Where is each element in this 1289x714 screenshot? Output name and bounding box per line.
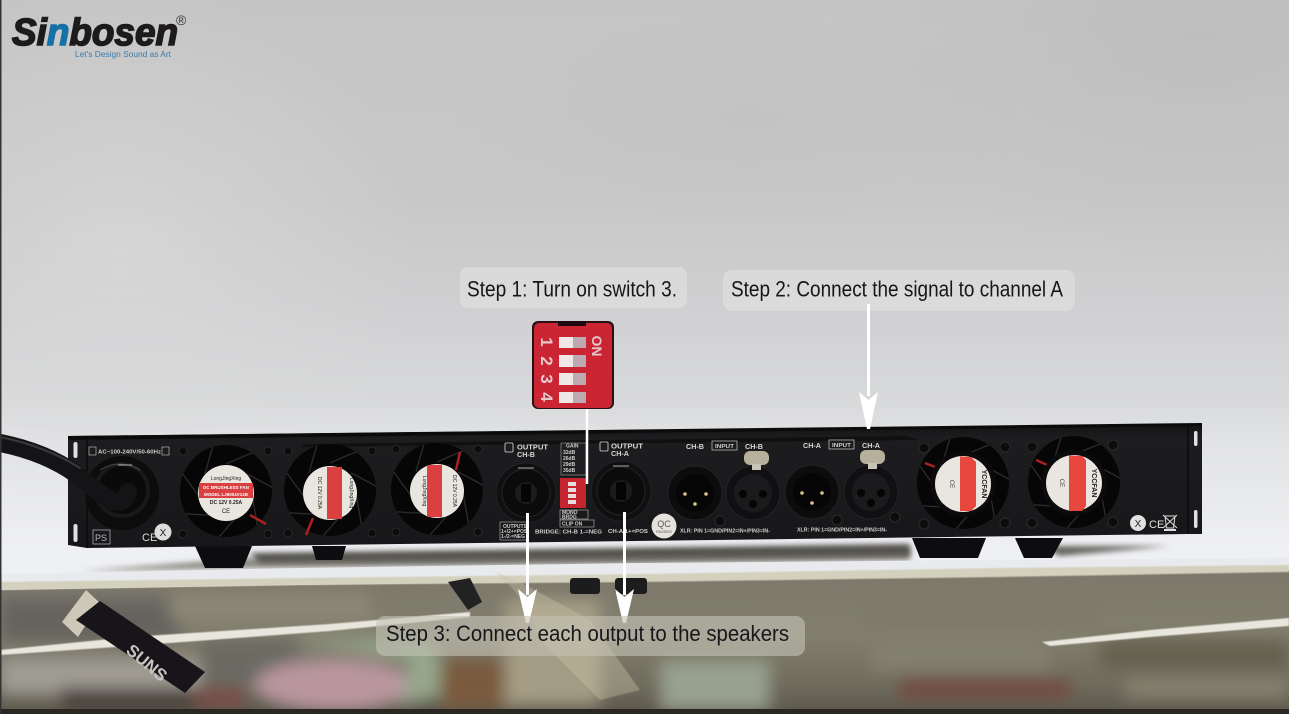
input labels: CH-A — [862, 443, 880, 450]
gain panel: GAIN — [566, 444, 579, 450]
gain panel: 26dB — [563, 456, 576, 462]
gain panel: 35dB — [563, 468, 576, 474]
small DIP switch on panel — [560, 478, 586, 508]
reflective metal surface — [0, 570, 1289, 714]
fan 1: DC BRUSHLESS FAN — [203, 485, 249, 490]
left certification marks: PS — [95, 533, 107, 543]
input labels: INPUT — [715, 444, 734, 450]
output label CH-A: OUTPUT — [611, 444, 644, 450]
power cable gland — [85, 456, 159, 530]
XLR male CH-B — [668, 466, 722, 520]
arrow: output CH-B to speakers — [518, 513, 537, 623]
fan 1: CE — [222, 509, 230, 515]
XLR pin text: XLR: PIN 1=GND/PIN2=IN+/PIN3=IN- — [680, 528, 770, 534]
step 1 label — [460, 267, 687, 308]
outputs polarity box: OUTPUTS — [503, 524, 528, 530]
outputs polarity box: 1-/2-=NEG — [501, 534, 525, 540]
output label CH-A: CH-A — [611, 451, 629, 458]
arrow: output CH-A to speakers — [615, 512, 634, 623]
input labels: CH-B — [745, 444, 763, 451]
registered mark: ® — [176, 12, 187, 28]
fan 4: CE — [948, 480, 954, 488]
gain panel: 29dB — [563, 462, 576, 468]
gain panel: 32dB — [563, 450, 576, 456]
switch numbers — [537, 337, 556, 402]
XLR pin text — [680, 528, 887, 534]
surface highlights and tape — [0, 558, 1289, 714]
left certification marks: X — [160, 528, 167, 539]
XLR female CH-B — [726, 451, 780, 520]
arrow: step 2 to channel A input — [859, 304, 878, 429]
fan 4: YCCFAN — [980, 470, 987, 498]
logo wordmark: Sinbosen — [12, 12, 178, 54]
chassis — [68, 423, 1202, 548]
power cable — [0, 437, 128, 502]
step 3 label — [376, 616, 805, 656]
switch 2 — [559, 355, 586, 367]
XLR male CH-A — [785, 465, 839, 519]
logo tagline: Let's Design Sound as Art — [75, 49, 172, 59]
output label CH-A — [600, 442, 644, 458]
fan 1: LongJingXing — [211, 476, 241, 482]
fan 1: DC 12V 0.25A — [210, 500, 243, 506]
fan 3 — [391, 443, 483, 535]
input labels: CH-B — [686, 444, 704, 451]
right certification marks: X — [1135, 519, 1142, 530]
mono and clip labels: MONO — [562, 510, 578, 516]
QC sticker: PASSED — [656, 529, 672, 534]
fan 3: DC 12V 0.25A — [451, 475, 457, 508]
step 1 label: Step 1: Turn on switch 3. — [467, 276, 677, 302]
fan 1: MODEL LJ6004V12B — [204, 492, 249, 497]
switch 1 — [559, 337, 586, 348]
outputs polarity box — [500, 522, 528, 540]
input labels: INPUT — [832, 443, 851, 449]
output connector CH-A — [591, 461, 651, 521]
left certification marks: CE — [142, 532, 157, 544]
enlarged DIP switch inset — [532, 321, 614, 409]
mono and clip labels: CLIP ON — [562, 522, 583, 528]
switch 3 — [559, 373, 586, 385]
switch numbers: 2 — [537, 356, 556, 366]
output label CH-B — [505, 443, 549, 459]
left certification marks — [93, 524, 172, 544]
gain panel — [561, 443, 586, 475]
switch numbers: 4 — [537, 392, 556, 402]
outputs polarity box: 1+/2+=POS — [501, 529, 528, 535]
amplifier feet — [195, 538, 1063, 568]
input labels — [686, 440, 880, 451]
fan 2 — [284, 444, 376, 536]
step 2 label — [723, 270, 1075, 311]
fan 2: DC 12V 0.25A — [316, 477, 322, 510]
bridge label: CH-A 1+=POS — [608, 529, 649, 535]
step 3 label: Step 3: Connect each output to the speakers — [386, 621, 789, 646]
XLR pin text: XLR: PIN 1=GND/PIN2=IN+/PIN3=IN- — [797, 528, 887, 534]
input labels: CH-A — [803, 443, 821, 450]
output label CH-B: OUTPUT — [517, 444, 549, 452]
XLR female CH-A — [844, 450, 898, 519]
fan 5 — [1028, 436, 1120, 528]
rack ear slots — [74, 431, 1198, 542]
logo — [12, 12, 187, 59]
fan 5: YCCFAN — [1090, 469, 1097, 497]
power label: AC~100-240V/50-60Hz — [98, 450, 162, 456]
step 2 label: Step 2: Connect the signal to channel A — [731, 276, 1063, 302]
fan 4 — [917, 437, 1009, 529]
table shadow under amplifier — [80, 544, 1170, 571]
fan 1 — [180, 445, 272, 537]
bridge label: BRIDGE: CH-B 1-=NEG — [535, 530, 602, 536]
surface highlights and tape: SUNS — [122, 641, 171, 685]
QC sticker — [652, 514, 676, 538]
right certification marks — [1130, 515, 1177, 531]
switch numbers: 1 — [537, 337, 556, 347]
arrow: DIP inset to panel switch — [586, 409, 588, 484]
mono and clip labels: BRDG — [562, 514, 577, 520]
power label — [89, 447, 169, 456]
bridge label — [535, 529, 649, 536]
switch numbers: 3 — [537, 374, 556, 384]
ON marking: ON — [589, 336, 605, 356]
output label CH-B: CH-B — [517, 452, 535, 459]
right certification marks: CE — [1149, 519, 1164, 531]
switch 4 — [559, 392, 586, 403]
fan 3: LongJingXing — [421, 476, 427, 506]
mounting screws — [179, 440, 1118, 538]
QC sticker: QC — [657, 519, 671, 529]
amplifier rear panel — [0, 423, 1202, 548]
output connector CH-B — [496, 463, 556, 523]
fan 2: LongJingXing — [348, 478, 354, 508]
fan 5: CE — [1058, 479, 1064, 487]
mono and clip labels — [560, 510, 594, 528]
